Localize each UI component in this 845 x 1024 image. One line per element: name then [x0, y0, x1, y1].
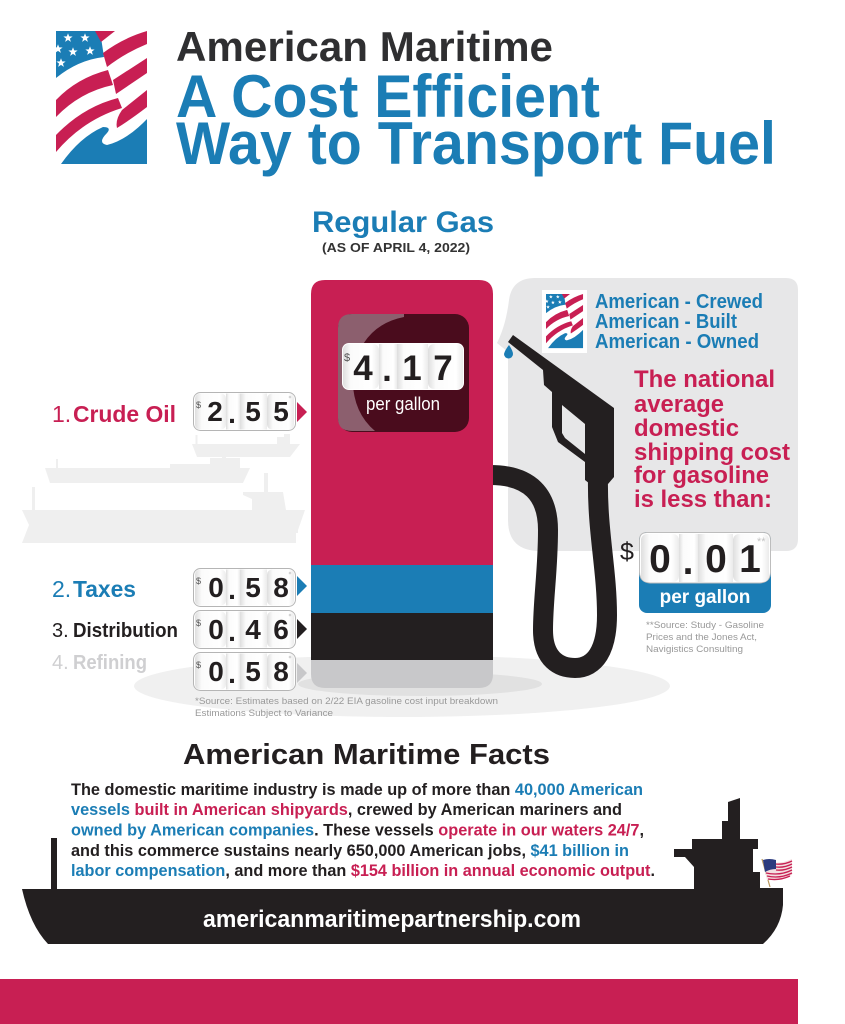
american crewed built owned list: American - Crewed: [595, 290, 763, 313]
pump display: total price: .: [382, 350, 392, 389]
row 2: taxes: 8: [273, 572, 289, 603]
source note: cost breakdown: *Source: Estimates based on 2/22 EIA gasoline cost input breakdown: [195, 696, 498, 707]
pump display: total price: [338, 314, 469, 432]
callout: national average: is less than:: [634, 486, 772, 513]
row 3: distribution: 6: [273, 614, 289, 645]
row 1: crude oil: 5: [245, 396, 261, 427]
foreground ship: [22, 798, 792, 944]
shipping cost meter: 1: [739, 538, 761, 581]
small flag logo: [542, 290, 587, 353]
shipping cost meter: .: [683, 540, 693, 583]
heading: regular gas: Regular Gas: [312, 206, 494, 239]
footer band: [0, 979, 798, 1024]
row 1: crude oil: .: [228, 398, 236, 429]
pump display: total price: 4: [353, 349, 373, 388]
facts paragraph: vessels built in American shipyards, crewed by American mariners and: [71, 801, 622, 819]
heading: regular gas: [312, 206, 494, 255]
row 1: crude oil: [52, 392, 307, 430]
shipping cost meter: 0: [705, 538, 727, 581]
shipping cost meter: per gallon: [660, 587, 750, 608]
row 3: distribution: 3.: [52, 620, 69, 642]
facts paragraph: The domestic maritime industry is made up of more than 40,000 American: [71, 781, 643, 799]
title: A Cost Efficient: [176, 63, 600, 130]
facts paragraph: and this commerce sustains nearly 650,000 American jobs, $41 billion in: [71, 842, 629, 860]
shipping cost meter: $: [620, 538, 634, 566]
heading: regular gas: (AS OF APRIL 4, 2022): [322, 240, 470, 255]
row 3: distribution: Distribution: [73, 620, 178, 642]
american crewed built owned list: American - Owned: [595, 330, 759, 353]
american crewed built owned list: American - Built: [595, 310, 737, 333]
callout: national average: [634, 366, 790, 513]
source note: cost breakdown: Estimations Subject to Variance: [195, 708, 333, 719]
row 2: taxes: .: [228, 574, 236, 605]
row 4: refining: 8: [273, 656, 289, 687]
row 2: taxes: 0: [208, 572, 224, 603]
nozzle: [508, 335, 614, 484]
row 1: crude oil: 5: [273, 396, 289, 427]
row 4: refining: $: [196, 660, 201, 670]
row 2: taxes: 2.: [52, 576, 71, 602]
row 1: crude oil: 1.: [52, 401, 71, 427]
title: [176, 23, 776, 177]
callout: national average: shipping cost: [634, 439, 790, 466]
callout: national average: domestic: [634, 415, 739, 442]
facts paragraph: labor compensation, and more than $154 billion in annual economic output.: [71, 862, 655, 880]
row 2: taxes: $: [196, 576, 201, 586]
pump display: total price: 1: [402, 349, 422, 388]
panel: domestic shipping cost: [497, 278, 798, 551]
facts paragraph: owned by American companies. These vessels operate in our waters 24/7,: [71, 822, 644, 840]
pump display: total price: 7: [433, 349, 453, 388]
row 2: taxes: Taxes: [73, 576, 136, 602]
shipping cost meter: 0: [649, 538, 671, 581]
facts paragraph: [71, 781, 655, 880]
source note: cost breakdown: [195, 696, 498, 719]
row 3: distribution: .: [228, 616, 236, 647]
shipping cost meter: [620, 532, 771, 613]
shipping cost meter: **: [757, 536, 766, 548]
row 3: distribution: 4: [245, 614, 261, 645]
title: Way to Transport Fuel: [176, 110, 776, 177]
heading: facts: American Maritime Facts: [183, 739, 550, 771]
row 3: distribution: 0: [208, 614, 224, 645]
row 4: refining: 4.: [52, 652, 69, 674]
row 4: refining: 0: [208, 656, 224, 687]
row 1: crude oil: Crude Oil: [73, 401, 176, 427]
pump body: [311, 280, 493, 688]
title: American Maritime: [176, 23, 553, 70]
callout: national average: for gasoline: [634, 462, 769, 489]
row 4: refining: Refining: [73, 652, 147, 674]
fuel drop: [504, 345, 513, 358]
source note: shipping study: Navigistics Consulting: [646, 644, 743, 655]
source note: shipping study: [646, 620, 764, 655]
source note: shipping study: **Source: Study - Gasoline: [646, 620, 764, 631]
pump display: total price: $: [344, 352, 350, 364]
row 4: refining: 5: [245, 656, 261, 687]
pump base shadow: [134, 655, 670, 717]
row 4: refining: [52, 652, 307, 690]
background ship silhouettes: [22, 434, 305, 543]
row 4: refining: .: [228, 658, 236, 689]
icon: american flag: [762, 859, 792, 887]
row 1: crude oil: $: [196, 400, 201, 410]
row 3: distribution: [52, 610, 307, 648]
row 2: taxes: 5: [245, 572, 261, 603]
callout: national average: average: [634, 391, 724, 418]
source note: shipping study: Prices and the Jones Act,: [646, 632, 757, 643]
row 1: crude oil: 2: [207, 396, 223, 427]
row 2: taxes: [52, 568, 307, 606]
website url: americanmaritimepartnership.com: [203, 906, 581, 933]
logo: waving flag: [53, 31, 147, 164]
pump display: total price: per gallon: [366, 393, 440, 414]
american crewed built owned list: [595, 290, 763, 353]
hose: [490, 475, 607, 668]
callout: national average: The national: [634, 366, 775, 393]
row 3: distribution: $: [196, 618, 201, 628]
